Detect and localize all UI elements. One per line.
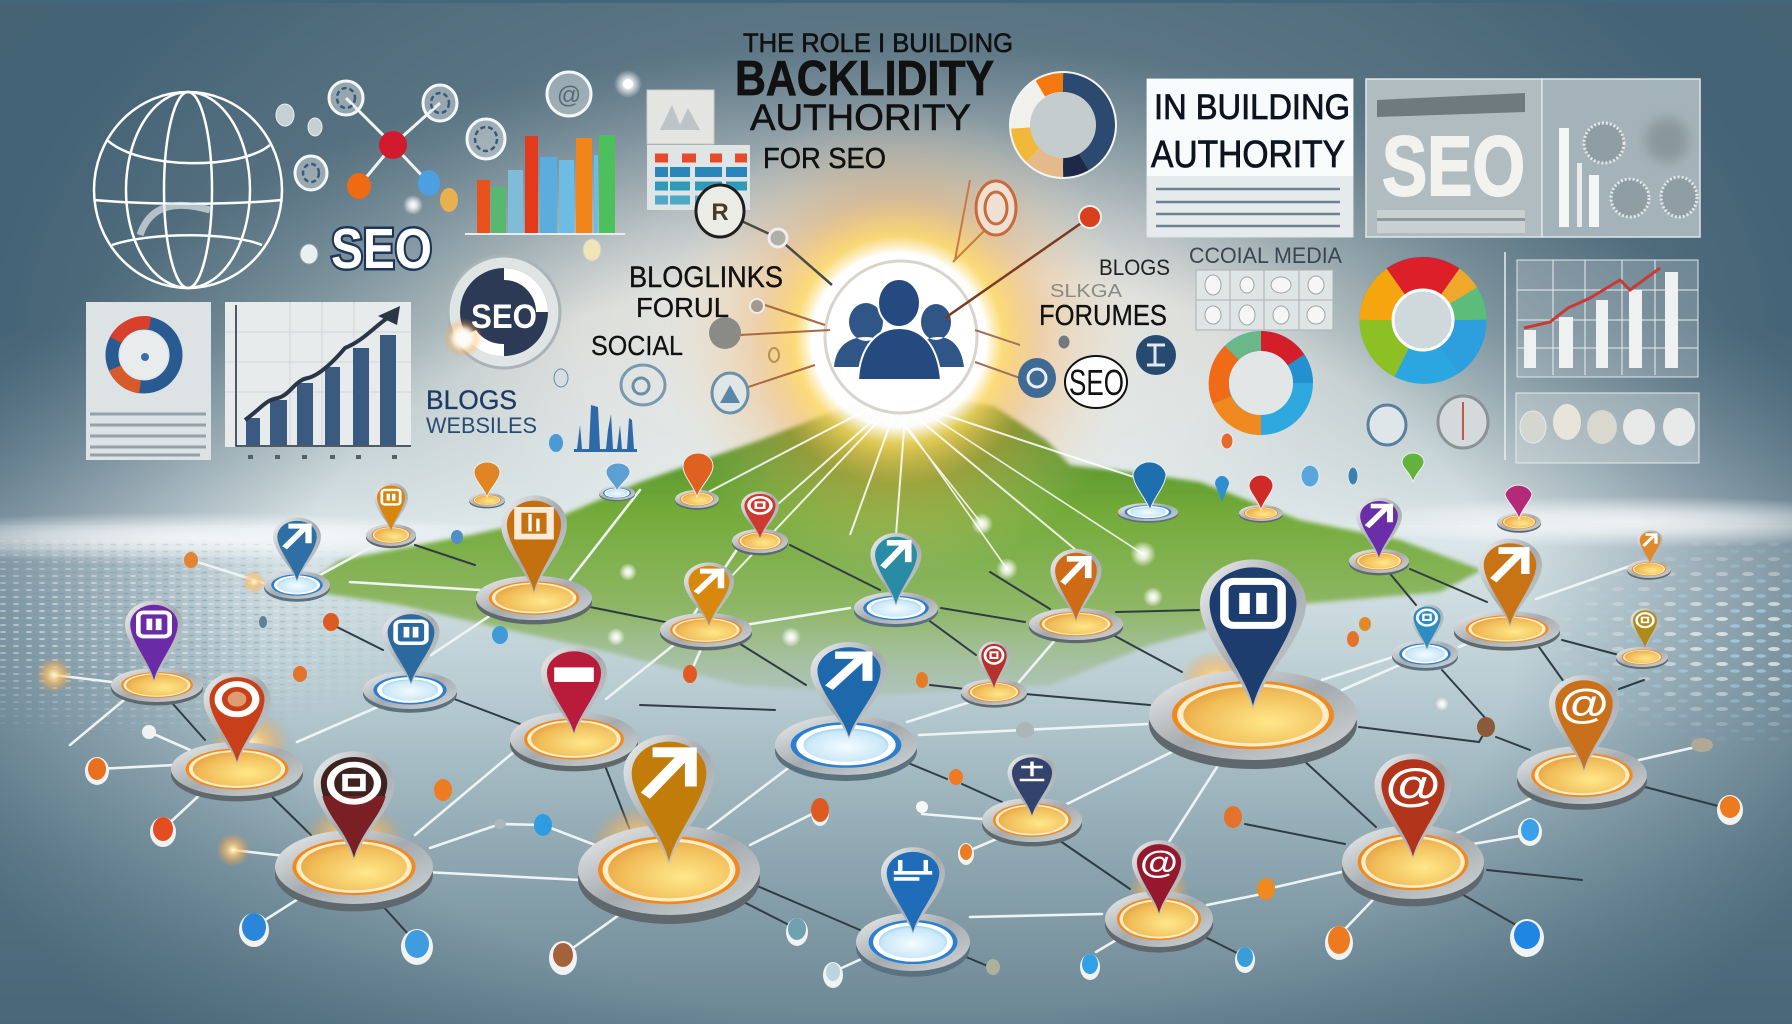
- title line 1: THE ROLE I BUILDING: [743, 28, 1013, 58]
- colour tile grid: [647, 145, 750, 210]
- pin: blue arrow large: [775, 642, 917, 781]
- skyline mini chart: [549, 405, 637, 452]
- icon: blue ring: [621, 365, 665, 405]
- pin: red at-sign: @: [1385, 759, 1441, 810]
- panel: SEO glass card: SEO: [1382, 119, 1525, 213]
- node: ring middle: [467, 119, 505, 159]
- icon: right person: [912, 304, 964, 367]
- pin: small blue far: [599, 463, 635, 501]
- pin: red small: [732, 491, 788, 555]
- panel heading: IN BUILDING: [1154, 88, 1350, 127]
- mini rings mid-left: [554, 369, 568, 387]
- label: social: SOCIAL: [591, 330, 683, 361]
- icon: grey badge: [709, 317, 741, 349]
- red trend line: [1524, 268, 1660, 328]
- highlight flares: [452, 79, 633, 349]
- rays from hub: [697, 408, 1143, 600]
- pin: maroon large: [275, 751, 433, 911]
- colour bar chart: [465, 135, 625, 235]
- node: ring left: [295, 156, 327, 190]
- small picture card: [647, 90, 714, 144]
- node: orange: [347, 173, 371, 199]
- icon: red dot: [1079, 206, 1101, 228]
- donut: [112, 323, 176, 387]
- lower badges: [1368, 396, 1488, 448]
- network diagram icon: @: [557, 82, 581, 109]
- pin: small blue sliver: [1215, 476, 1229, 502]
- icon: envelope ring: [712, 373, 748, 413]
- bars: [246, 335, 396, 445]
- pin: navy small: [982, 754, 1082, 846]
- small far pins: [469, 453, 1541, 533]
- label: forum: FORUL: [636, 292, 729, 323]
- social media grid: [1196, 270, 1333, 330]
- pin: blue bottom: [856, 847, 970, 977]
- pin: small pink right: [1497, 485, 1541, 533]
- title: [735, 28, 1013, 175]
- title line 4: FOR SEO: [763, 143, 886, 175]
- icon: dark ring: [696, 185, 744, 237]
- location bead: [549, 434, 563, 452]
- panel: growth chart: [225, 302, 411, 457]
- central hub icon: [825, 261, 977, 413]
- pin: crimson at-sign: [1105, 840, 1213, 953]
- pin: blue arrow left: [264, 517, 330, 602]
- pin: orange arrow right: [1454, 539, 1560, 651]
- panel: in building authority: [1147, 79, 1353, 237]
- badge: SEO: [1065, 356, 1127, 408]
- mountain: [300, 392, 1482, 695]
- network diagram icon: [276, 70, 642, 264]
- pin: small orange far: [469, 462, 505, 508]
- sun glow: [609, 50, 1189, 630]
- pin: orange square large: [476, 495, 592, 624]
- pin: purple far: [1349, 498, 1409, 575]
- ring connector icons: [621, 185, 787, 413]
- label: bloglinks: BLOGLINKS: [629, 261, 783, 294]
- rainbow donut chart: [1376, 273, 1470, 367]
- pin: purple large: [111, 600, 203, 705]
- globe icon: [94, 92, 282, 288]
- pin: red small centre: [961, 641, 1027, 708]
- pin: orange small right: [1627, 530, 1671, 580]
- right text labels: [1039, 255, 1170, 332]
- badge: blue: [1018, 358, 1056, 398]
- upper spoke connectors: [720, 180, 1090, 393]
- pin: orange arrow large: [578, 735, 760, 924]
- node: ring top right: [423, 85, 457, 121]
- colour ring chart: [1219, 341, 1303, 449]
- node: ring top left: [329, 81, 363, 115]
- panel: line and bar chart: [1505, 252, 1698, 460]
- panel: SEO glass card: [1366, 79, 1542, 237]
- panel subheading: AUTHORITY: [1151, 134, 1345, 176]
- upper right connector icons: [976, 181, 1101, 235]
- label: garbled sub-label: SLKGA: [1050, 281, 1122, 301]
- pin: tiny blue dot right: [1348, 467, 1358, 485]
- node: blue: [418, 170, 440, 196]
- SEO gauge badge: SEO: [471, 298, 537, 336]
- panel: donut report: [86, 302, 211, 460]
- badge: metal: [1438, 396, 1488, 448]
- report text lines: [90, 414, 206, 455]
- pin: teal small right: [1392, 604, 1458, 671]
- badge: blue swirl: [1368, 405, 1406, 445]
- pin: orange small left: [366, 483, 416, 548]
- icon: orange ring: [976, 181, 1016, 235]
- pin: orange at-sign right: @: [1559, 680, 1609, 726]
- pin: orange at-sign right: [1517, 675, 1647, 810]
- pin: olive small: [1616, 608, 1668, 669]
- panel: glass icons card: [1542, 79, 1700, 237]
- ring connector icons: R: [711, 199, 729, 226]
- node: red: [379, 131, 407, 159]
- left text labels: [426, 261, 783, 438]
- pin: navy large: [1149, 559, 1357, 769]
- pin: red at-sign: [1342, 754, 1484, 906]
- title line 2: BACKLIDITY: [735, 52, 994, 106]
- pin: orange arrow centre-right: [1029, 549, 1123, 643]
- network connections: [54, 490, 1722, 972]
- SEO label left: SEO: [331, 217, 432, 281]
- pin: orange arrow centre-left: [660, 562, 752, 650]
- pin: red-orange ring: [171, 672, 303, 801]
- white bars: [1524, 272, 1678, 368]
- title line 3: AUTHORITY: [750, 97, 971, 138]
- icon: centre person: [858, 279, 941, 380]
- panel: five circle icons: [1516, 393, 1699, 463]
- top donut chart: [1010, 72, 1116, 178]
- growth arrow: [245, 306, 400, 420]
- pin: blue square: [363, 610, 457, 713]
- label: websites: WEBSILES: [426, 413, 537, 438]
- icon: left person: [834, 303, 890, 367]
- label: blogs: BLOGS: [1099, 255, 1170, 280]
- SEO gauge badge: [443, 256, 560, 368]
- badges near hub: SEO: [1069, 362, 1124, 403]
- pin: crimson at-sign: @: [1140, 845, 1178, 880]
- pin: small green top: [1402, 453, 1424, 482]
- badge: navy: [1136, 335, 1176, 375]
- beads: [36, 513, 1743, 988]
- icon: small metal ring: [769, 229, 787, 247]
- badges near hub: [1018, 335, 1176, 408]
- label: blogs: BLOGS: [426, 385, 517, 415]
- chart marker: [1221, 433, 1233, 449]
- pin: small orange-red far: [675, 453, 719, 510]
- social media label: CCOIAL MEDIA: [1189, 243, 1342, 268]
- pin: small red top: [1239, 475, 1283, 523]
- pin: teal: [854, 533, 938, 627]
- node: at ring: [547, 72, 591, 116]
- pin: crimson minus: [510, 647, 638, 771]
- label: forumes: FORUMES: [1039, 300, 1167, 332]
- pin: small blue top: [1118, 462, 1178, 523]
- pin: tiny blue dot: [1301, 465, 1319, 487]
